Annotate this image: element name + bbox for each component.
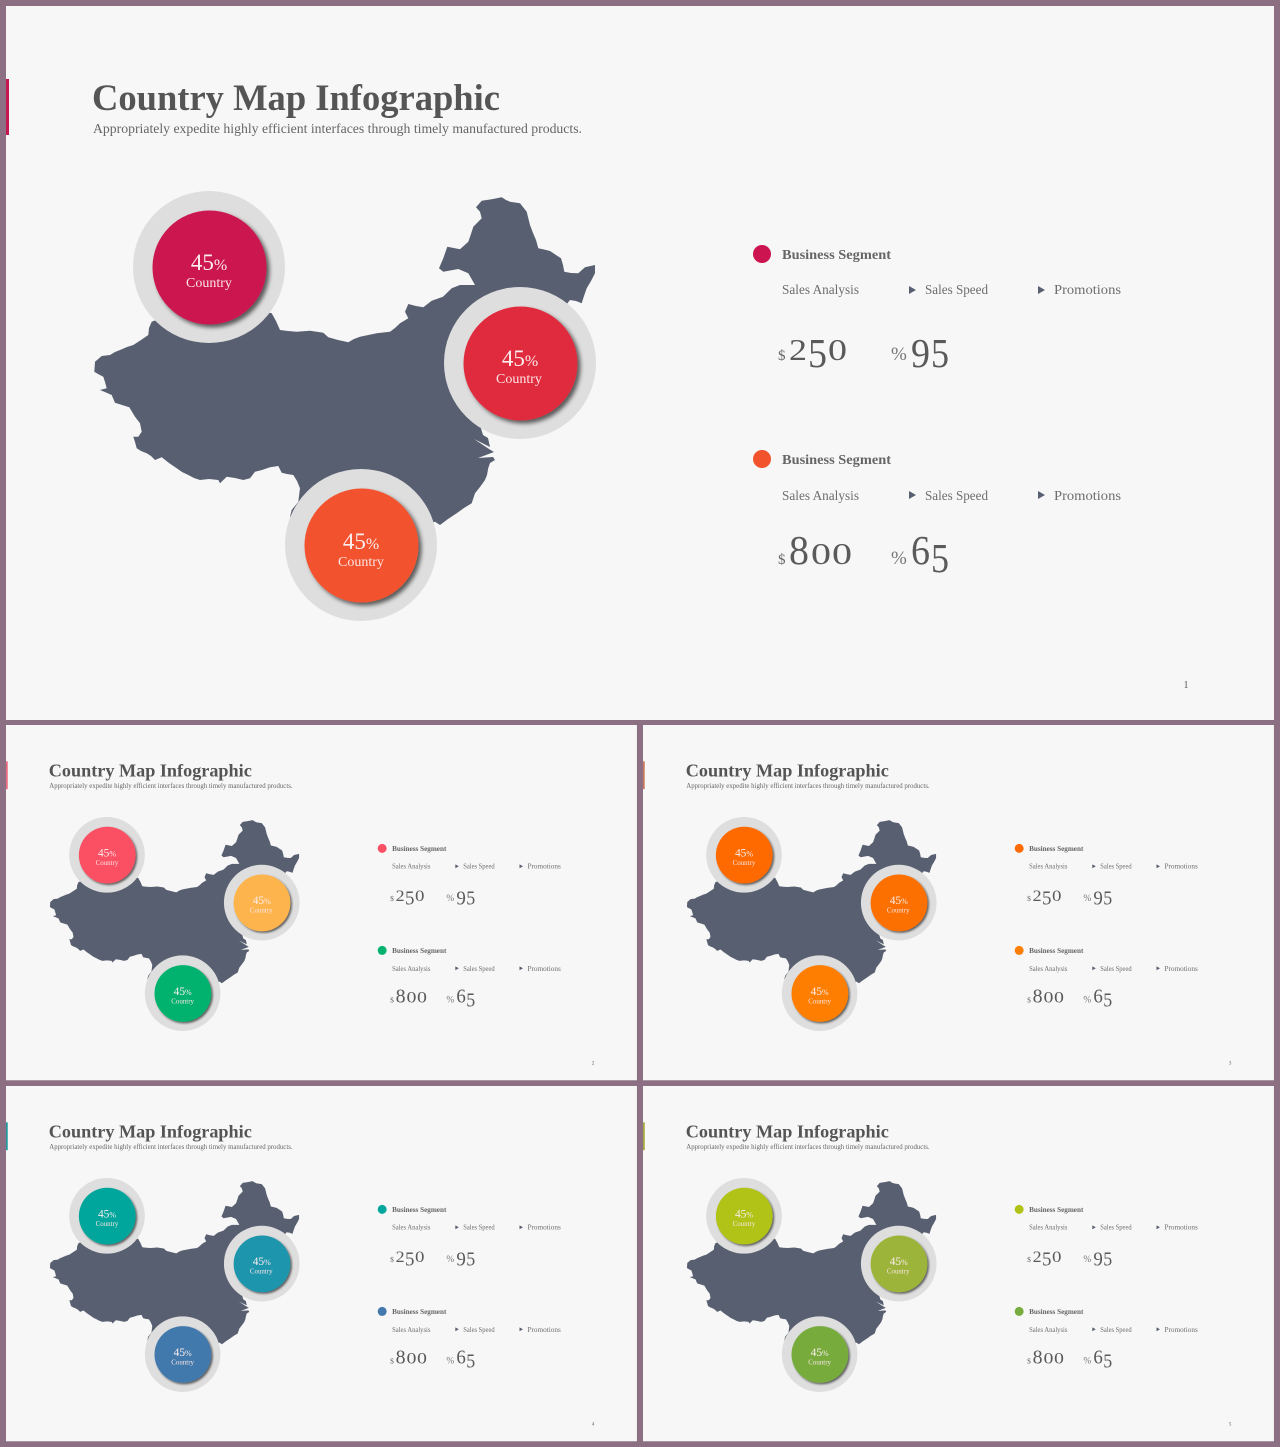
legend block 2: % — [891, 548, 907, 569]
legend block 2: Promotions — [527, 965, 561, 973]
title: Country Map Infographic — [49, 761, 252, 781]
callout circle 3: 45% — [811, 986, 829, 998]
callout circle 2 — [861, 865, 937, 940]
callout circle 1: 45% — [735, 847, 753, 859]
title: Country Map Infographic — [49, 1122, 252, 1142]
legend block 2: 0 — [811, 536, 831, 571]
callout circle 3: 45% — [174, 986, 192, 998]
legend block 2: Business Segment — [392, 947, 447, 955]
legend block 1: 2 — [396, 888, 405, 905]
legend block 1: 0 — [415, 888, 425, 905]
legend block 1: 2 — [1033, 1249, 1042, 1266]
legend block 2: Business Segment — [1029, 1308, 1084, 1316]
legend block 2: 8 — [789, 527, 809, 573]
callout circle 1: Country — [96, 1220, 119, 1228]
legend block 2: Promotions — [1054, 489, 1121, 504]
legend block 2: $ — [1027, 1357, 1031, 1366]
callout circle 2: 45% — [253, 895, 271, 907]
legend block 1: Business Segment — [392, 1206, 447, 1214]
legend block 2: 0 — [832, 536, 852, 571]
legend block 1: 5 — [1103, 888, 1112, 910]
china map — [687, 1181, 936, 1354]
callout circle 1 — [69, 1178, 145, 1254]
legend block 1: 9 — [911, 330, 930, 376]
page number: 3 — [1229, 1061, 1232, 1066]
legend block 1: Sales Analysis — [392, 862, 431, 870]
slide 5: lime green — [643, 1086, 1274, 1441]
callout circle 1 — [69, 817, 145, 893]
subtitle: Appropriately expedite highly efficient interfaces through timely manufactured products. — [49, 1143, 293, 1151]
callout circle 3: Country — [171, 998, 195, 1006]
callout circle 2: Country — [250, 907, 273, 915]
page number: 1 — [1184, 680, 1188, 691]
legend block 1: 2 — [789, 332, 807, 367]
legend block 2: 0 — [1044, 1351, 1054, 1368]
legend block 2: 0 — [417, 990, 427, 1007]
title: Country Map Infographic — [686, 761, 889, 781]
legend block 1: Sales Speed — [1100, 862, 1132, 870]
legend block 1: $ — [778, 348, 786, 364]
callout circle 3: 45% — [811, 1347, 829, 1359]
legend block 1: % — [891, 344, 907, 365]
legend block 2: Sales Analysis — [782, 489, 859, 504]
legend block 1: % — [446, 1255, 454, 1265]
legend block 1: Business Segment — [1029, 1206, 1084, 1214]
legend block 1 — [378, 1205, 561, 1271]
callout circle 2 — [224, 865, 300, 940]
china map — [50, 820, 299, 993]
callout circle 1: 45% — [98, 847, 116, 859]
legend block 1: Business Segment — [782, 248, 891, 263]
legend block 1: Promotions — [1164, 1223, 1198, 1231]
callout circle 3 — [145, 1316, 220, 1392]
legend block 2: 0 — [407, 1351, 417, 1368]
callout circle 1 — [706, 817, 782, 893]
callout circle 1: 45% — [735, 1208, 753, 1220]
legend block 2: % — [446, 1357, 454, 1367]
callout circle 2: Country — [496, 372, 542, 387]
legend block 1: 2 — [396, 1249, 405, 1266]
legend block 1: Sales Analysis — [782, 283, 859, 298]
legend block 2: % — [1083, 996, 1091, 1006]
legend block 1: 0 — [828, 332, 847, 367]
legend block 1: 9 — [1093, 1249, 1103, 1271]
legend block 2: Business Segment — [782, 453, 891, 468]
accent bar — [6, 79, 9, 135]
legend block 2: 5 — [1103, 990, 1112, 1012]
legend block 1: $ — [1027, 1255, 1031, 1264]
callout circle 2: 45% — [890, 1256, 908, 1268]
legend block 1: Sales Speed — [463, 1223, 495, 1231]
page number: 2 — [592, 1061, 595, 1066]
callout circle 3: Country — [338, 555, 384, 570]
legend block 1: Sales Speed — [925, 283, 988, 298]
legend block 1: 5 — [1042, 1249, 1052, 1271]
callout circle 2: 45% — [253, 1256, 271, 1268]
legend block 2: Promotions — [527, 1326, 561, 1334]
page number: 5 — [1229, 1422, 1232, 1427]
legend block 2: $ — [390, 1357, 394, 1366]
legend block 1: Sales Speed — [463, 862, 495, 870]
accent bar — [6, 761, 8, 789]
accent bar — [643, 1122, 645, 1150]
legend block 1: $ — [390, 1255, 394, 1264]
callout circle 1: 45% — [98, 1208, 116, 1220]
legend block 1: 9 — [456, 1249, 466, 1271]
legend block 2: 8 — [1033, 986, 1043, 1008]
legend block 1: Business Segment — [1029, 845, 1084, 853]
callout circle 2: 45% — [502, 346, 538, 371]
legend block 1: 5 — [405, 888, 415, 910]
legend block 2: Sales Speed — [463, 1326, 495, 1334]
accent bar — [6, 1122, 8, 1150]
legend block 2: 5 — [1103, 1351, 1112, 1373]
china map — [94, 197, 595, 545]
legend block 2: Promotions — [1164, 965, 1198, 973]
legend block 2: 0 — [1044, 990, 1054, 1007]
legend block 2: 0 — [417, 1351, 427, 1368]
legend block 2: Sales Speed — [1100, 965, 1132, 973]
slide 1: large crimson slide — [6, 6, 1274, 720]
slide 3: orange — [643, 725, 1274, 1080]
china map — [50, 1181, 299, 1354]
callout circle 3: Country — [808, 1359, 832, 1367]
subtitle: Appropriately expedite highly efficient interfaces through timely manufactured products. — [686, 782, 930, 790]
legend block 2: 6 — [456, 986, 466, 1008]
callout circle 3: Country — [171, 1359, 195, 1367]
legend block 2: 8 — [396, 986, 406, 1008]
legend block 1: % — [1083, 1255, 1091, 1265]
legend block 1: 9 — [1093, 888, 1103, 910]
callout circle 2: Country — [887, 1268, 910, 1276]
callout circle 2: 45% — [890, 895, 908, 907]
legend block 1: 5 — [466, 888, 475, 910]
callout circle 2 — [861, 1226, 937, 1301]
page number: 4 — [592, 1422, 595, 1427]
legend block 1: 5 — [1103, 1249, 1112, 1271]
legend block 2: 5 — [466, 1351, 475, 1373]
legend block 2: Sales Analysis — [392, 1326, 431, 1334]
legend block 2: 6 — [911, 527, 930, 573]
legend block 2: $ — [390, 996, 394, 1005]
legend block 2: 0 — [1054, 1351, 1064, 1368]
callout circle 2: Country — [887, 907, 910, 915]
legend block 1 — [1015, 1205, 1198, 1271]
title: Country Map Infographic — [686, 1122, 889, 1142]
legend block 1: 5 — [808, 330, 827, 376]
legend block 2: Promotions — [1164, 1326, 1198, 1334]
subtitle: Appropriately expedite highly efficient interfaces through timely manufactured products. — [49, 782, 293, 790]
legend block 2: Sales Speed — [1100, 1326, 1132, 1334]
callout circle 2 — [224, 1226, 300, 1301]
callout circle 3: Country — [808, 998, 832, 1006]
legend block 2: % — [1083, 1357, 1091, 1367]
legend block 2: $ — [1027, 996, 1031, 1005]
callout circle 3: 45% — [343, 529, 379, 554]
legend block 2 — [378, 1307, 561, 1373]
subtitle: Appropriately expedite highly efficient interfaces through timely manufactured products. — [686, 1143, 930, 1151]
legend block 2: $ — [778, 552, 786, 568]
legend block 1: Sales Analysis — [1029, 862, 1068, 870]
legend block 1: 5 — [405, 1249, 415, 1271]
china map — [687, 820, 936, 993]
callout circle 1: 45% — [191, 250, 227, 275]
legend block 2: Sales Speed — [463, 965, 495, 973]
legend block 1: $ — [390, 894, 394, 903]
legend block 1: Sales Analysis — [392, 1223, 431, 1231]
callout circle 3 — [285, 469, 437, 621]
callout circle 3 — [145, 955, 220, 1031]
callout circle 3: 45% — [174, 1347, 192, 1359]
subtitle: Appropriately expedite highly efficient interfaces through timely manufactured products. — [93, 122, 582, 137]
legend block 1: 0 — [1052, 1249, 1062, 1266]
legend block 1: % — [1083, 894, 1091, 904]
legend block 2: Business Segment — [392, 1308, 447, 1316]
callout circle 1: Country — [733, 859, 756, 867]
legend block 2: 8 — [396, 1347, 406, 1369]
accent bar — [643, 761, 645, 789]
slide 2: pink amber green — [6, 725, 637, 1080]
legend block 2: % — [446, 996, 454, 1006]
legend block 1: Business Segment — [392, 845, 447, 853]
legend block 2: 5 — [931, 535, 949, 581]
legend block 2: Business Segment — [1029, 947, 1084, 955]
callout circle 3 — [782, 1316, 857, 1392]
legend block 1: 5 — [931, 330, 949, 376]
callout circle 1: Country — [733, 1220, 756, 1228]
legend block 2 — [1015, 946, 1198, 1012]
legend block 2: 6 — [1093, 1347, 1103, 1369]
legend block 2: 0 — [1054, 990, 1064, 1007]
legend block 1 — [378, 844, 561, 910]
legend block 1: Promotions — [1164, 862, 1198, 870]
callout circle 2: Country — [250, 1268, 273, 1276]
legend block 2: Sales Analysis — [1029, 965, 1068, 973]
legend block 1: Sales Analysis — [1029, 1223, 1068, 1231]
legend block 1: Promotions — [1054, 283, 1121, 298]
legend block 2: Sales Speed — [925, 489, 988, 504]
legend block 2: 6 — [1093, 986, 1103, 1008]
legend block 2: 8 — [1033, 1347, 1043, 1369]
slide 4: teal blue — [6, 1086, 637, 1441]
legend block 1: Promotions — [527, 1223, 561, 1231]
callout circle 1: Country — [186, 276, 232, 291]
legend block 1: 5 — [466, 1249, 475, 1271]
legend block 1: $ — [1027, 894, 1031, 903]
legend block 1: 9 — [456, 888, 466, 910]
legend block 1: 0 — [1052, 888, 1062, 905]
callout circle 2 — [444, 287, 596, 439]
legend block 1: Sales Speed — [1100, 1223, 1132, 1231]
callout circle 3 — [782, 955, 857, 1031]
legend block 2 — [378, 946, 561, 1012]
legend block 2: 5 — [466, 990, 475, 1012]
legend block 1: 2 — [1033, 888, 1042, 905]
legend block 1 — [753, 245, 1121, 376]
callout circle 1 — [133, 191, 285, 343]
legend block 1: Promotions — [527, 862, 561, 870]
legend block 2: 6 — [456, 1347, 466, 1369]
legend block 1: 0 — [415, 1249, 425, 1266]
legend block 2: Sales Analysis — [392, 965, 431, 973]
legend block 1: % — [446, 894, 454, 904]
legend block 2 — [1015, 1307, 1198, 1373]
legend block 2: 0 — [407, 990, 417, 1007]
legend block 1: 5 — [1042, 888, 1052, 910]
legend block 2 — [753, 450, 1121, 581]
title: Country Map Infographic — [92, 78, 500, 119]
legend block 1 — [1015, 844, 1198, 910]
callout circle 1 — [706, 1178, 782, 1254]
legend block 2: Sales Analysis — [1029, 1326, 1068, 1334]
callout circle 1: Country — [96, 859, 119, 867]
